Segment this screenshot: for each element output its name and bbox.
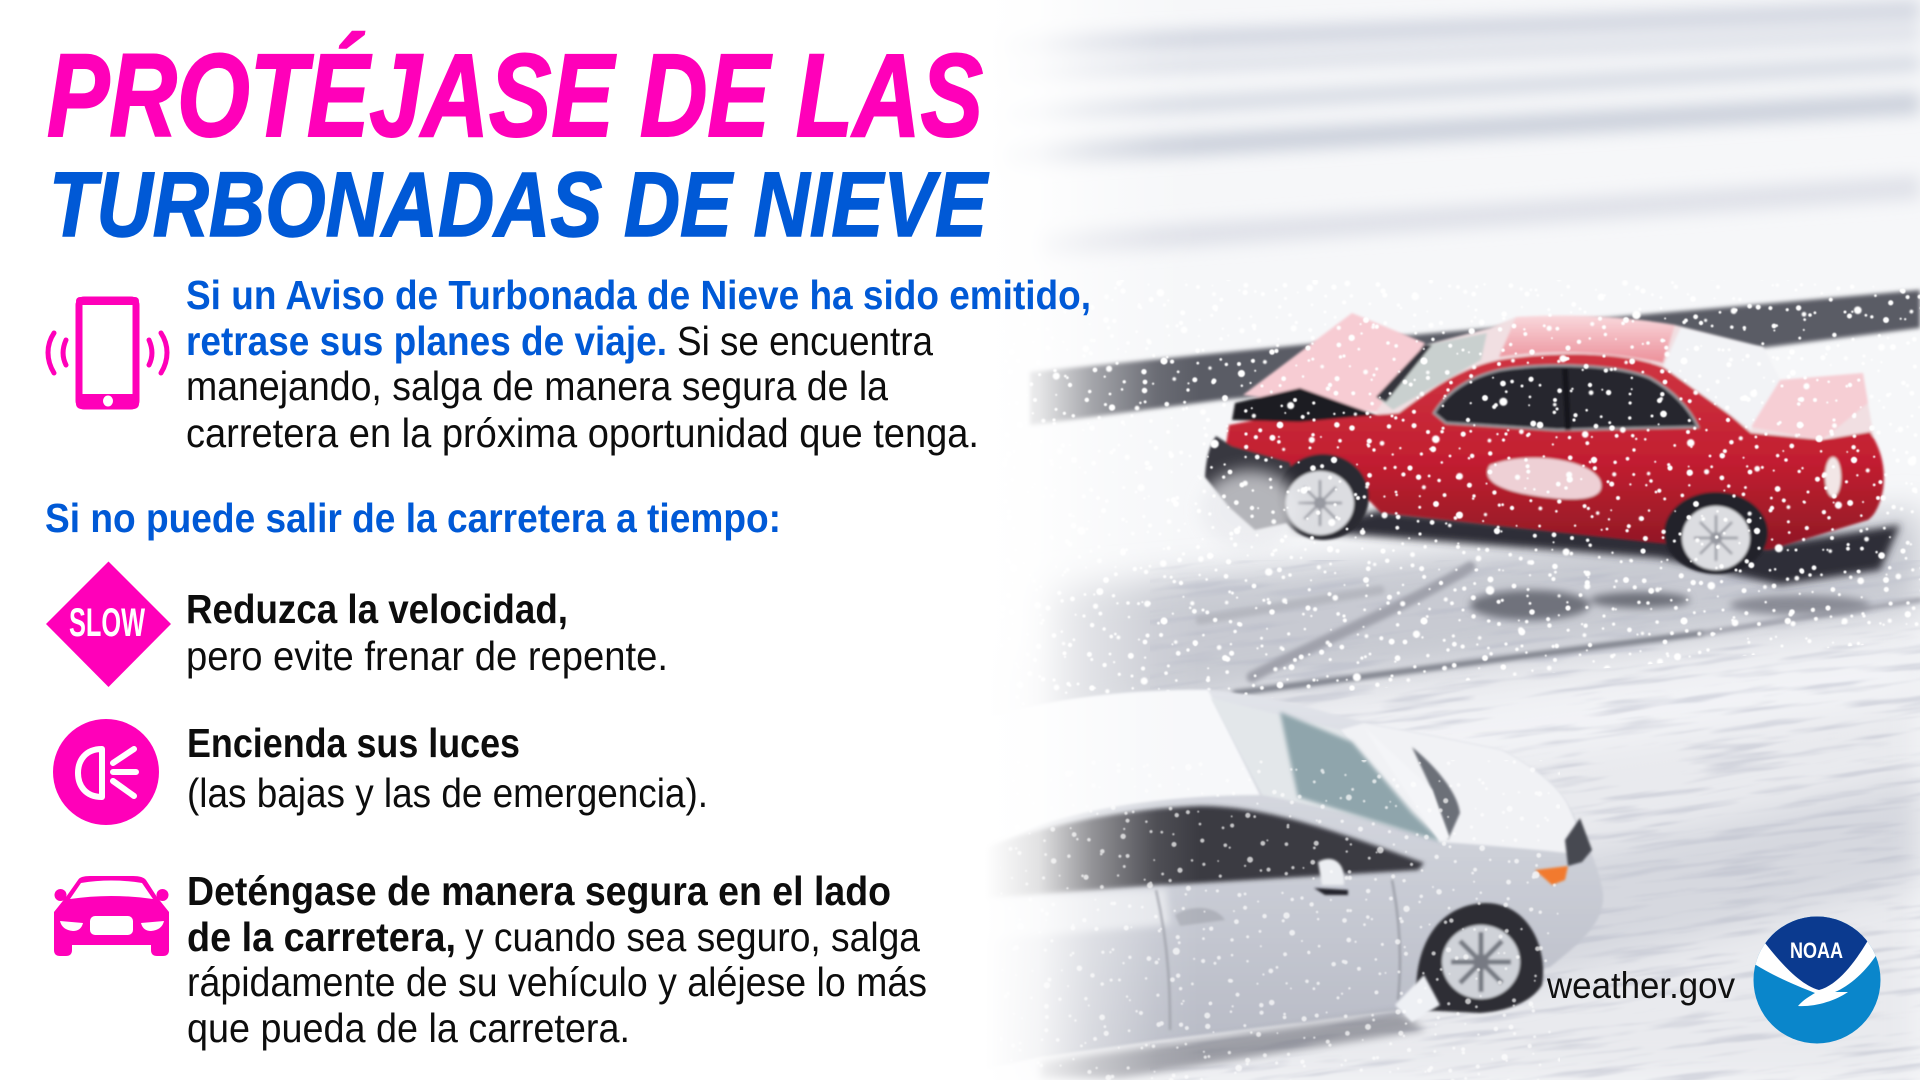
text block: pull over: de la carretera, <box>187 914 456 960</box>
falling snow over the upper scene <box>1000 280 1920 720</box>
red car <box>1205 313 1884 574</box>
text block: turn on lights: Encienda sus luces <box>187 720 520 766</box>
white cover left of the photo <box>900 0 985 1080</box>
text block: warning advice: retrase sus planes de viaje. <box>186 318 667 364</box>
logo: NOAA: NOAA <box>1790 938 1843 963</box>
icon: headlight <box>53 719 159 825</box>
text block: turn on lights <box>187 720 708 816</box>
shadow below the red car <box>1290 510 1900 585</box>
text block: pull over: que pueda de la carretera. <box>187 1005 630 1051</box>
text block: pull over <box>187 868 927 1051</box>
text block: pull over: y cuando sea seguro, salga <box>465 914 920 960</box>
subheading: Si no puede salir de la carretera a tiempo: <box>45 495 781 541</box>
front wheel <box>1277 454 1369 540</box>
text block: reduce speed: pero evite frenar de repente. <box>186 633 668 679</box>
falling snow over the silver car <box>1000 760 1560 1080</box>
text block: reduce speed: Reduzca la velocidad, <box>186 586 568 632</box>
dark road band behind the red car <box>1030 290 1920 425</box>
icon: slow diamond sign <box>46 562 171 687</box>
dark patch on the road <box>1470 590 1870 620</box>
logo: NOAA <box>1754 916 1880 1044</box>
road streaks at the top <box>1000 10 1920 245</box>
tire tracks <box>1200 567 1920 693</box>
text block: warning advice: Si un Aviso de Turbonada de Nieve ha sido emitido, <box>186 272 1091 318</box>
text block: warning advice: Si se encuentra <box>677 318 933 364</box>
title line 1: PROTÉJASE DE LAS <box>47 30 983 162</box>
text block: pull over: Deténgase de manera segura en el lado <box>187 868 891 914</box>
silver car <box>960 690 1603 1078</box>
icon: slow diamond sign: SLOW <box>69 601 145 645</box>
silver car wheel <box>1416 903 1543 1013</box>
title line 2: TURBONADAS DE NIEVE <box>49 154 989 256</box>
road under the silver car <box>1040 1012 1425 1078</box>
rear wheel <box>1664 492 1768 574</box>
snowy lower road <box>985 540 1920 1080</box>
text block: warning advice <box>186 272 1091 456</box>
icon: vibrating phone <box>48 297 167 409</box>
haze around the crashed front <box>1200 470 1300 550</box>
photo: snowy road with two cars <box>900 0 1920 1080</box>
text block: turn on lights: (las bajas y las de emergencia). <box>187 770 708 816</box>
road texture <box>1150 560 1920 1080</box>
website label: weather.gov <box>1546 965 1735 1006</box>
white fade into the text area <box>985 0 1200 1080</box>
icon: car front <box>54 876 169 956</box>
text block: warning advice: manejando, salga de manera segura de la <box>186 363 888 409</box>
text block: pull over: rápidamente de su vehículo y aléjese lo más <box>187 959 927 1005</box>
text block: warning advice: carretera en la próxima oportunidad que tenga. <box>186 410 979 456</box>
text block: reduce speed <box>186 586 668 679</box>
